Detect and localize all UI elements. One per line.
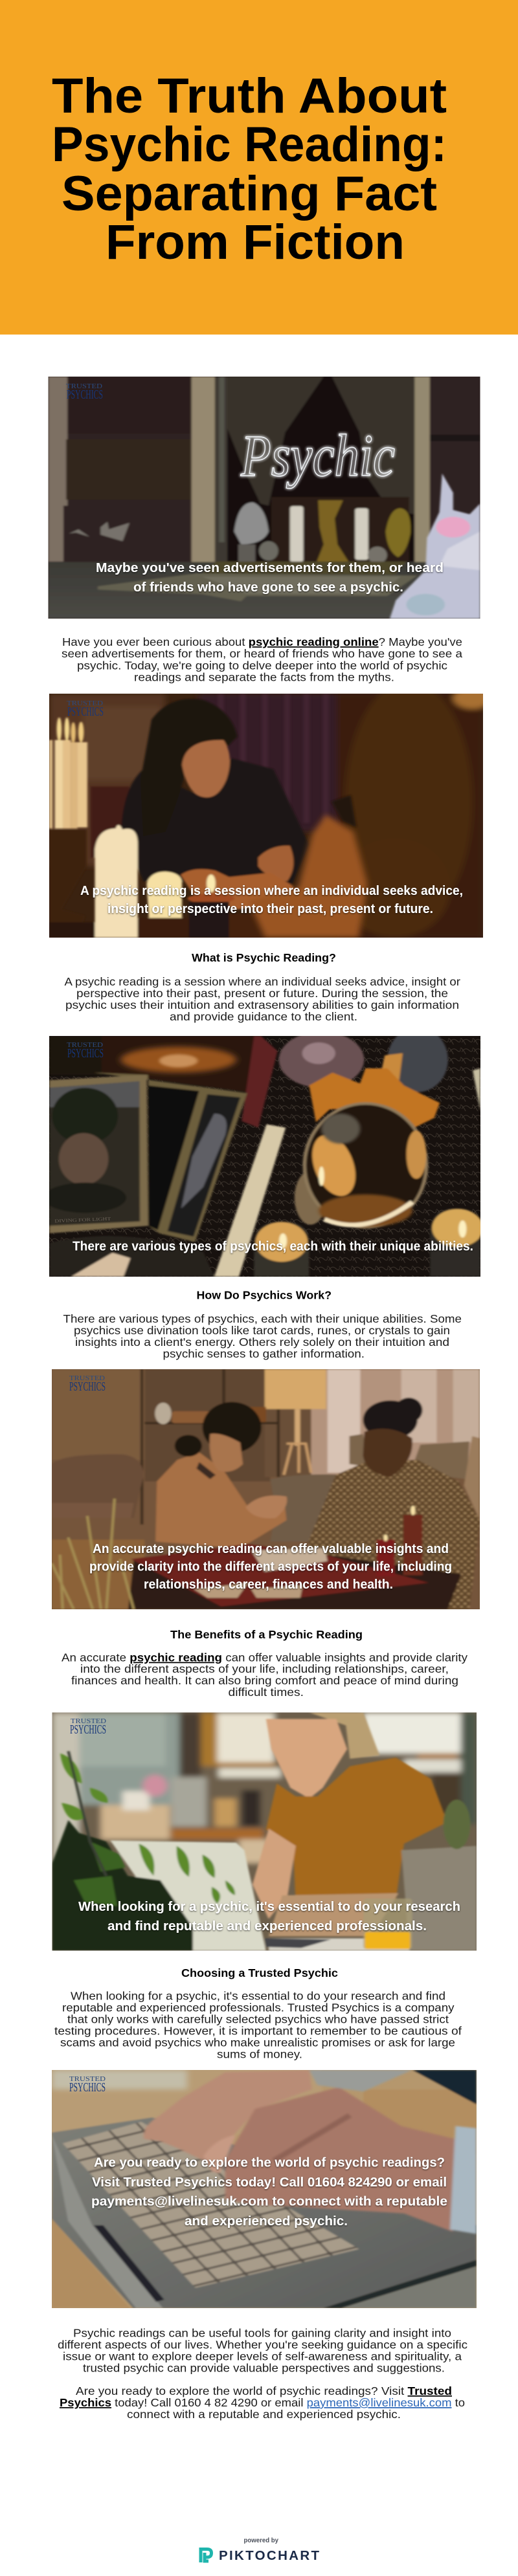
caption: Maybe you've seen advertisements for them, or heard [96,561,444,575]
logo [66,383,103,402]
logo [69,2076,106,2095]
caption: provide clarity into the different aspects of your life, including [89,1559,452,1574]
logo: TRUSTED [71,1718,106,1725]
text block: conclusion: different aspects of our lives. Whether you're seeking guidance on a specific [58,2339,467,2351]
caption: of friends who have gone to see a psychic. [133,580,403,595]
logo: TRUSTED [69,1375,105,1382]
caption: Visit Trusted Psychics today! Call 01604 824290 or email [92,2175,447,2190]
text block: conclusion: issue or want to explore deeper levels of self-awareness and spirituality, a [63,2350,462,2363]
panel: psychic reading palm [49,681,492,938]
caption: An accurate psychic reading can offer valuable insights and [93,1542,449,1556]
panel: two women at table [52,1369,480,1609]
logo: TRUSTED [67,700,103,707]
caption: insight or perspective into their past, present or future. [107,902,433,916]
caption: Are you ready to explore the world of psychic readings? [94,2156,445,2170]
caption [91,2156,447,2229]
text block: choosing a trusted psychic: scams and avoid psychics who make unrealistic promises or ask for large [60,2036,455,2049]
title: The Truth About [52,69,447,124]
heading: choosing a trusted psychic: Choosing a Trusted Psychic [181,1966,338,1979]
text block: benefits [62,1651,467,1699]
text block: choosing a trusted psychic: that only works with carefully selected psychics who have passed strict [67,2012,449,2025]
text block: what is psychic reading: and provide guidance to the client. [170,1010,357,1023]
text block: call to action: Are you ready to explore the world of psychic readings? Visit Trusted [76,2384,452,2397]
logo: TRUSTED [67,1042,103,1049]
caption: relationships, career, finances and health. [144,1578,393,1592]
footer: powered by piktochart [201,2537,319,2563]
text block: intro: readings and separate the facts from the myths. [134,670,394,683]
logo [67,1042,104,1061]
text block: intro: seen advertisements for them, or heard of friends who have gone to see a [62,647,462,660]
logo: PSYCHICS [69,1380,106,1394]
photo: pendulum reading [52,1369,480,1609]
caption: When looking for a psychic, it's essential to do your research [78,1900,460,1914]
text block: how do psychics work: psychics use divination tools like tarot cards, runes, or crystals to gain [74,1324,450,1337]
caption: A psychic reading is a session where an individual seeks advice, [80,884,463,898]
text block: choosing a trusted psychic: testing procedures. However, it is important to remember to be cautious of [54,2024,462,2037]
text block: intro [62,635,462,683]
title [52,69,447,270]
photo: candlelit palm reading [49,694,483,938]
neon sign: Psychic [240,423,395,489]
text block: benefits: finances and health. It can also bring comfort and peace of mind during [71,1674,458,1687]
text block: choosing a trusted psychic [54,1989,462,2060]
photo: tarot cards and crystal ball: DIVING FOR LIGHT [54,1216,111,1224]
text block: how do psychics work: psychic senses to gather information. [163,1347,365,1360]
logo: TRUSTED [66,383,102,390]
text block: benefits: difficult times. [228,1686,304,1699]
text block: benefits: into the different aspects of your life, including relationships, career, [80,1662,449,1675]
caption [78,1900,460,1933]
text block: what is psychic reading: psychic uses their intuition and extrasensory abilities to gain information [65,998,459,1011]
logo [67,700,104,719]
photo: tarot cards and crystal ball [49,1036,480,1277]
photo: typing on laptop [52,2070,477,2308]
logo: PSYCHICS [67,705,104,719]
text block: intro: psychic. Today, we're going to delve deeper into the world of psychic [77,659,447,672]
photo: woman researching on laptop [52,1712,477,1950]
logo: TRUSTED [69,2076,106,2083]
text block: choosing a trusted psychic: When looking for a psychic, it's essential to do your research and find [71,1989,445,2002]
text block: what is psychic reading: A psychic reading is a session where an individual seeks advice, insight or [65,975,460,988]
text block: benefits: An accurate psychic reading can offer valuable insights and provide clarity [62,1651,467,1664]
text block: call to action [60,2384,465,2421]
text block: conclusion: Psychic readings can be useful tools for gaining clarity and insight into [73,2327,451,2340]
heading: what is psychic reading: What is Psychic Reading? [192,951,336,964]
logo [69,1375,106,1394]
caption: payments@livelinesuk.com to connect with a reputable [91,2195,447,2209]
footer: powered by piktochart: PIKTOCHART [219,2548,319,2563]
text block: call to action: connect with a reputable and experienced psychic. [127,2408,401,2421]
text block: conclusion [58,2327,467,2375]
caption [96,561,444,595]
logo: PSYCHICS [67,1046,104,1061]
footer: powered by piktochart: powered by [243,2537,278,2544]
header banner [0,0,518,335]
panel: hands on laptop [52,2070,477,2308]
caption: There are various types of psychics, each with their unique abilities. [73,1240,473,1254]
caption [80,884,463,916]
caption: and experienced psychic. [185,2214,348,2229]
caption [89,1542,452,1592]
title: From Fiction [106,215,405,270]
text block: how do psychics work [63,1312,462,1360]
text block: choosing a trusted psychic: sums of money. [217,2047,302,2060]
title: Psychic Reading: [52,117,447,172]
heading: benefits: The Benefits of a Psychic Reading [170,1628,363,1641]
panel: neon psychic shop window [48,377,480,619]
icon: piktochart mark [201,2549,211,2562]
text block: conclusion: trusted psychic can provide valuable perspectives and suggestions. [83,2362,445,2375]
text block: choosing a trusted psychic: reputable and experienced professionals. Trusted Psychics is a company [62,2001,455,2014]
text block: how do psychics work: insights into a client's energy. Others rely solely on their intuition and [75,1336,449,1349]
heading: how do psychics work: How Do Psychics Work? [197,1289,332,1302]
caption: and find reputable and experienced professionals. [107,1919,427,1933]
logo: PSYCHICS [67,388,103,402]
logo [70,1718,106,1737]
logo: PSYCHICS [70,1723,106,1737]
text block: call to action: Psychics today! Call 0160 4 82 4290 or email payments@livelinesuk.com to [60,2396,465,2409]
text block: what is psychic reading [65,975,460,1023]
logo: PSYCHICS [69,2080,106,2095]
panel: crystals and tarot [44,1028,483,1277]
text block: what is psychic reading: perspective into their past, present or future. During the session, the [76,987,448,1000]
text block: how do psychics work: There are various types of psychics, each with their unique abilities. Some [63,1312,462,1325]
panel: woman at laptop [52,1712,477,1950]
text block: intro: Have you ever been curious about psychic reading online ? Maybe you've [62,635,462,648]
title: Separating Fact [62,166,437,221]
photo: shop window [48,377,480,619]
